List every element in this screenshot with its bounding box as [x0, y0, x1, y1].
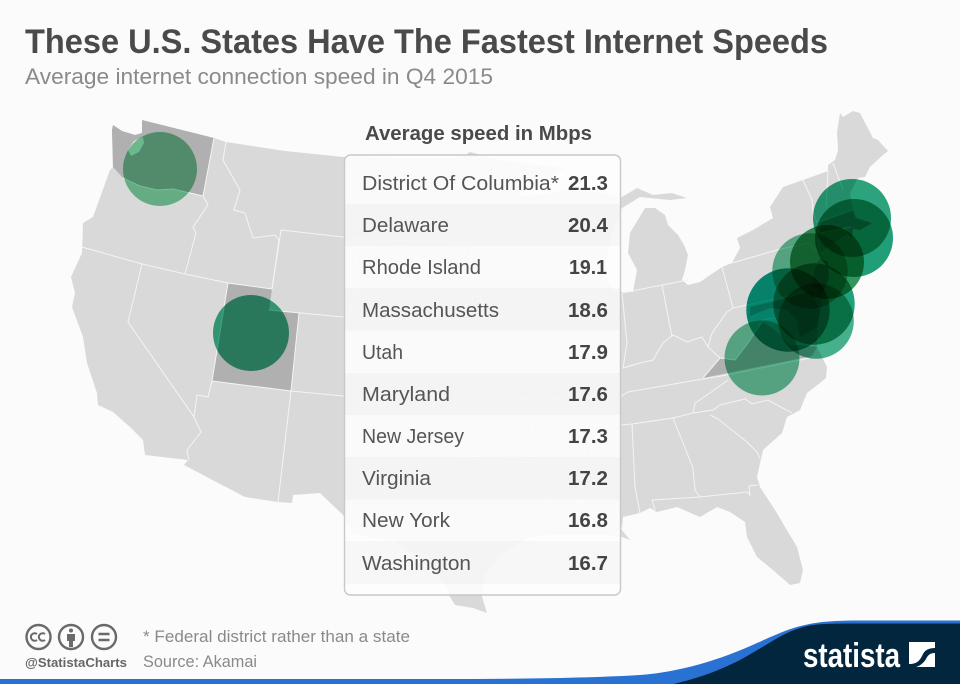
row: New Jersey: 17.3: [568, 426, 608, 448]
title: These U.S. States Have The Fastest Internet Speeds: [25, 23, 828, 61]
row: Virginia: [362, 468, 608, 490]
highlighted state: Washington: [112, 120, 214, 196]
map of the United States: [71, 111, 888, 613]
row: District Of Columbia: District Of Columbia*: [362, 173, 559, 195]
data panel: [344, 155, 620, 595]
highlighted state: Rhode Island: [847, 228, 853, 237]
bubble: New Jersey: [790, 225, 864, 299]
row: Utah: Utah: [362, 342, 403, 364]
row: Maryland: 17.6: [568, 384, 608, 406]
row: Delaware: 20.4: [568, 215, 609, 237]
row: District Of Columbia: 21.3: [568, 173, 608, 195]
bubble: Massachusetts: [813, 179, 891, 257]
row: Washington: Washington: [362, 553, 471, 575]
row: Washington: 16.7: [568, 553, 608, 575]
footnote: * Federal district rather than a state: [143, 628, 410, 646]
row: Massachusetts: 18.6: [568, 300, 608, 322]
handle: @StatistaCharts: [25, 655, 127, 670]
panel background: [344, 155, 620, 595]
statista logo: statista: [803, 637, 901, 675]
source: Source: Akamai: [143, 653, 257, 671]
row: Utah: 17.9: [568, 342, 608, 364]
row: Washington: [362, 553, 608, 575]
bubble: Utah: [213, 295, 289, 371]
row: Massachusetts: [362, 300, 608, 322]
highlighted state: Massachusetts: [820, 210, 872, 233]
row: Rhode Island: 19.1: [569, 257, 607, 279]
icon: statista mark: [909, 642, 935, 668]
row: Rhode Island: Rhode Island: [362, 257, 481, 279]
bubble: Washington: [123, 132, 197, 206]
row: New Jersey: New Jersey: [362, 426, 464, 448]
bubble: Maryland: [778, 283, 854, 359]
icon: creative commons licence: [26, 625, 116, 649]
footer band: [0, 620, 960, 684]
row: Virginia: Virginia: [362, 468, 432, 490]
panel heading: Average speed in Mbps: [365, 123, 592, 145]
row: New York: New York: [362, 510, 451, 532]
row: New Jersey: [362, 426, 608, 448]
row: Utah: [362, 342, 608, 364]
subtitle: Average internet connection speed in Q4 2015: [25, 64, 493, 89]
bubble: Delaware: [773, 263, 855, 345]
row stripes: [345, 204, 620, 584]
row: Rhode Island: [362, 257, 607, 279]
row: Virginia: 17.2: [568, 468, 608, 490]
blue wave and strip: [0, 620, 960, 684]
bubble: District of Columbia: [746, 268, 830, 352]
row: Massachusetts: Massachusetts: [362, 300, 499, 322]
bubble: New York: [772, 233, 848, 309]
row: Maryland: Maryland: [362, 384, 450, 406]
navy wave: [673, 624, 960, 684]
row: New York: 16.8: [568, 510, 608, 532]
state borders: [82, 138, 853, 533]
highlighted state: Virginia: [703, 322, 817, 378]
highlighted state: Utah: [212, 283, 299, 391]
bubble: Virginia: [724, 320, 800, 396]
row: Delaware: [362, 215, 609, 237]
highlighted state: Maryland: [750, 293, 820, 337]
highlighted state: Delaware: [805, 290, 820, 313]
row: Maryland: [362, 384, 608, 406]
row: New York: [362, 510, 608, 532]
land outline: [71, 111, 888, 613]
bubble: Rhode Island: [815, 199, 893, 277]
row: Delaware: Delaware: [362, 215, 449, 237]
highlighted state: New Jersey: [812, 258, 829, 293]
Puget Sound: [128, 137, 144, 156]
